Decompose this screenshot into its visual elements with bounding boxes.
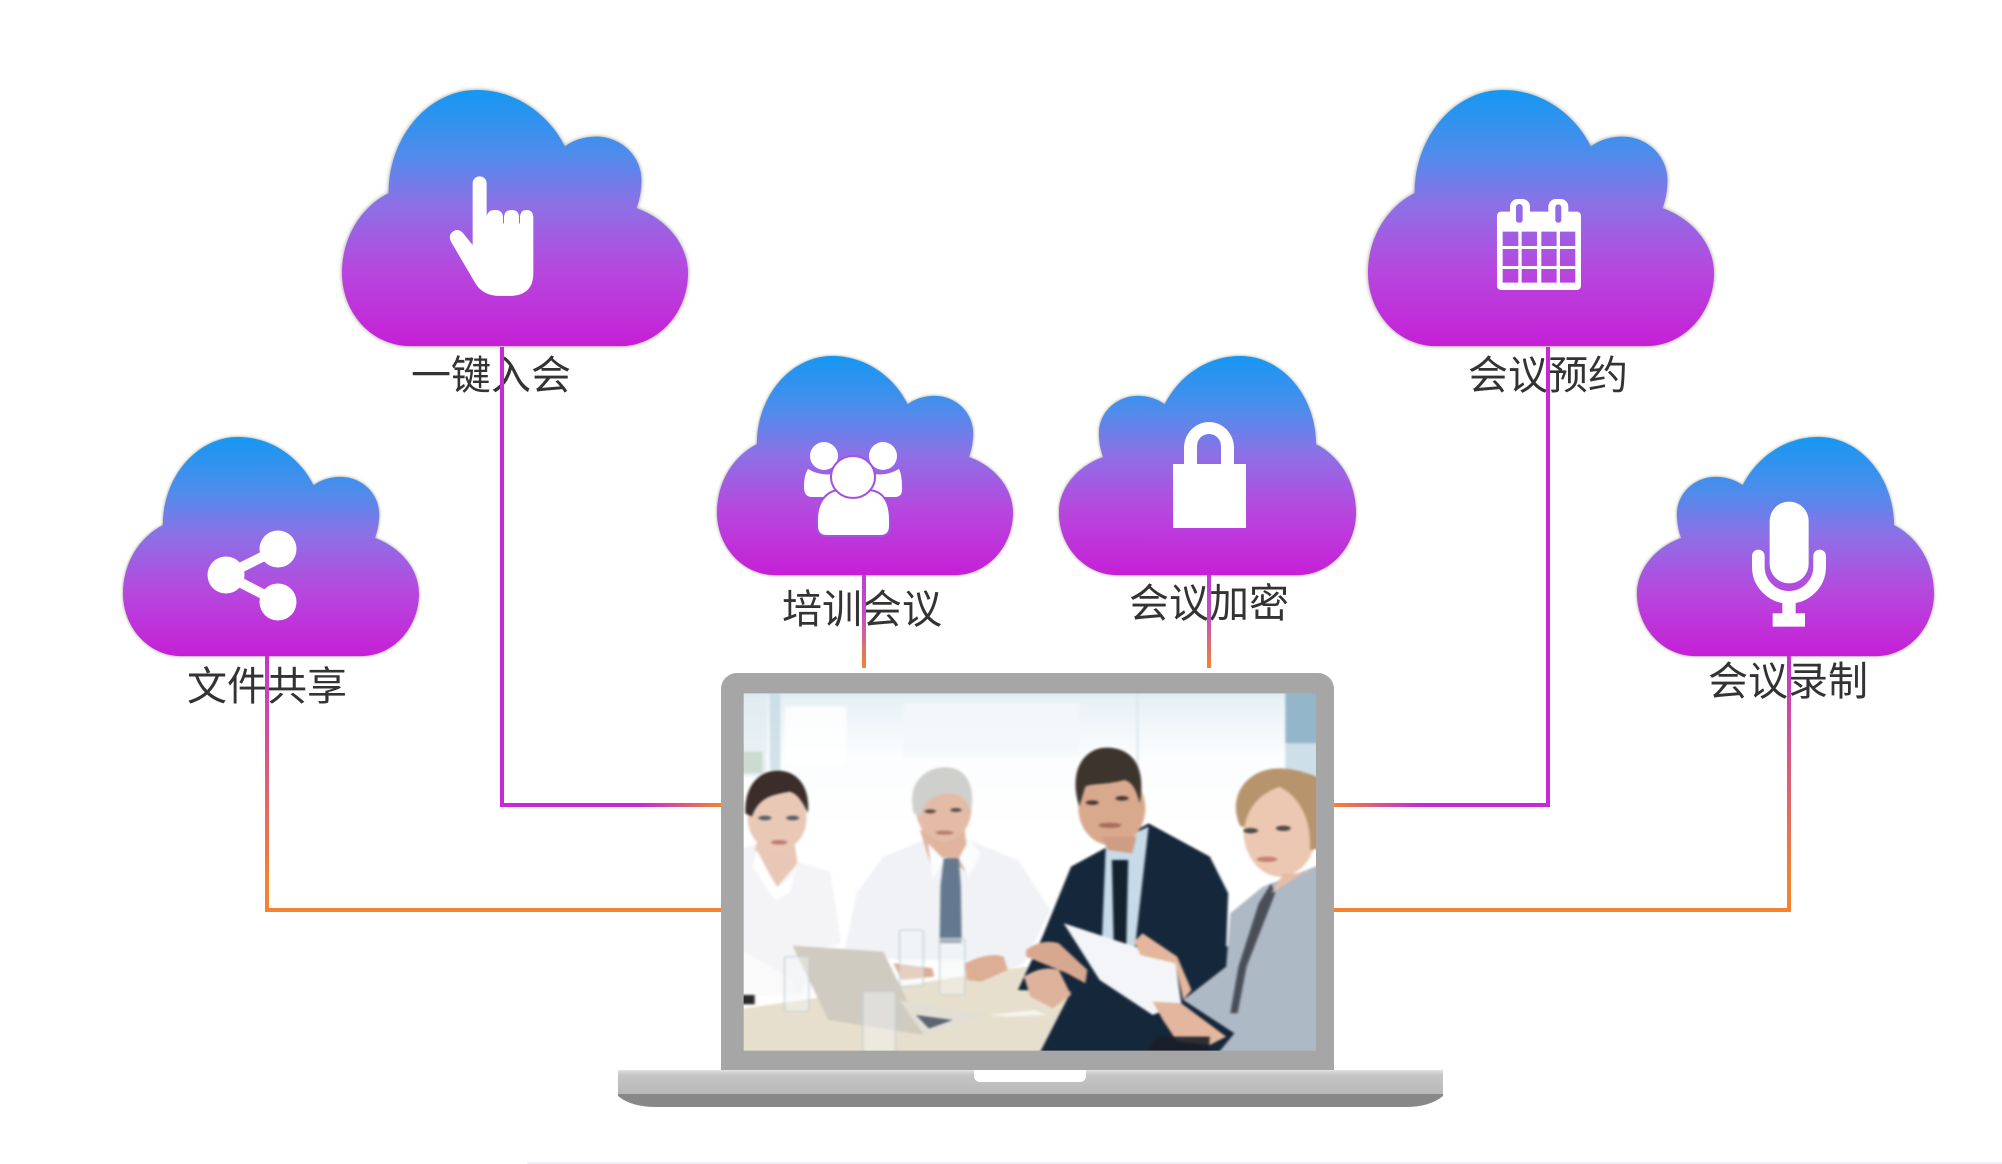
icon: calendar [1497,199,1581,290]
connector: meeting encryption to laptop [1207,575,1211,668]
laptop lid [721,673,1334,1070]
laptop [618,673,1443,1107]
label: one-click join: 一键入会 [411,354,571,398]
person: woman right [1182,766,1316,1051]
person: man in dark suit [1018,748,1236,1063]
table [744,966,1068,1051]
label: file sharing: 文件共享 [187,665,347,709]
cloud: training meeting [717,356,1013,575]
label: meeting recording: 会议录制 [1708,660,1868,704]
label: training meeting: 培训会议 [782,588,942,632]
connector: meeting booking to laptop [1334,347,1550,807]
meeting photo [744,693,1316,1051]
laptop base [618,1070,1443,1107]
cloud: meeting booking [1368,90,1714,346]
connector: training meeting to laptop [862,575,866,668]
icon: microphone [1758,502,1820,627]
cloud: one-click join [342,90,688,346]
laptop on table [793,946,1047,1035]
water glasses [784,930,965,1063]
cloud: meeting recording [1637,437,1934,656]
label: meeting booking: 会议预约 [1468,354,1628,398]
icon: group of people [804,442,902,536]
person: older man [845,767,1051,982]
connector: meeting recording to laptop [1334,656,1791,912]
connector: one-click join to laptop [500,347,721,805]
person: woman left [744,769,840,1006]
document held up [1064,923,1181,1015]
connector: file sharing to laptop [265,656,721,912]
cloud: meeting encryption [1059,356,1356,575]
icon: share [208,530,296,620]
icon: pointing hand [450,176,533,296]
icon: padlock [1173,422,1246,528]
cloud: file sharing [123,437,419,656]
hands of woman right [1134,933,1226,1045]
label: meeting encryption: 会议加密 [1129,582,1289,626]
